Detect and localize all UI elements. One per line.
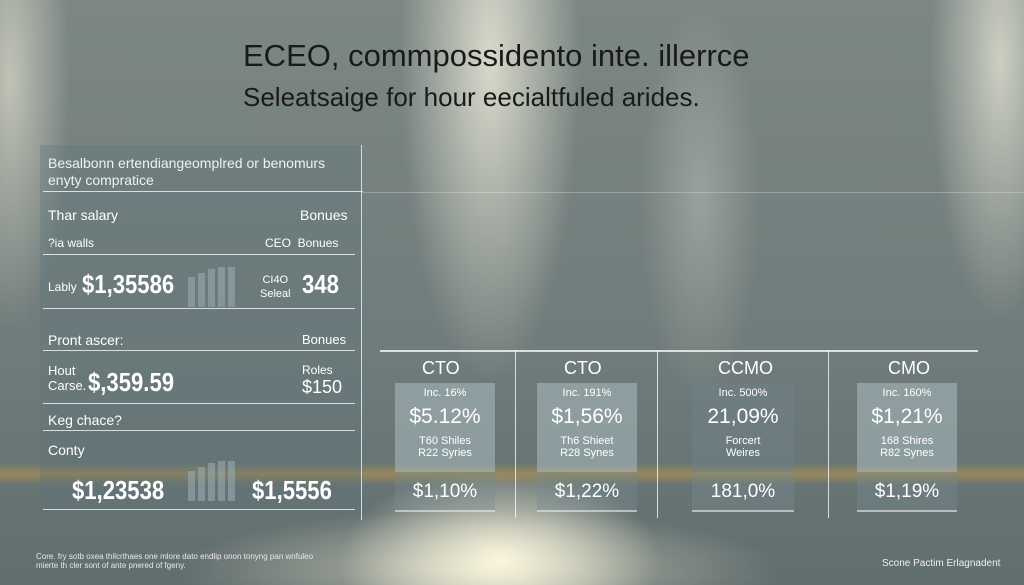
- panel header: [48, 155, 325, 188]
- text: CTO: [564, 358, 602, 378]
- card: CCMO: [692, 387, 794, 512]
- card: CTO 2: Th6 Shieet: [560, 435, 614, 447]
- panel: left comparison table: Roles: [302, 363, 333, 377]
- panel header: enyty compratice: [48, 172, 154, 188]
- card: CMO: [857, 383, 957, 512]
- card: CCMO: Inc. 500%: [719, 387, 767, 399]
- panel: left comparison table: $1,35586: [82, 269, 174, 299]
- card: CMO: $1,21%: [871, 405, 943, 428]
- source credit: Scone Pactim Erlagnadent: [882, 558, 1000, 569]
- row labels: Thar salary: [48, 207, 118, 223]
- card: CCMO: 181,0%: [711, 481, 775, 502]
- card: CTO 2: Inc. 191%: [563, 387, 611, 399]
- card: CTO 1: Inc. 16%: [424, 387, 466, 399]
- panel: left comparison table: CEO Bonues: [265, 236, 338, 250]
- panel: executive cards: [380, 350, 978, 518]
- footnote: Core. fry sotb oxea thilcrthaes one mlore dato endlip onon tonyng pan wnfuleo: [36, 552, 313, 561]
- panel: left comparison table: $150: [302, 377, 342, 397]
- card: CMO: Inc. 160%: [883, 387, 931, 399]
- card: CMO: $1,19%: [875, 481, 939, 502]
- footnote: [36, 552, 313, 570]
- panel: left comparison table: [40, 145, 363, 512]
- card: CMO: R82 Synes: [880, 447, 934, 459]
- bar chart icon: [188, 267, 235, 307]
- panel: left comparison table: Bonues: [300, 207, 347, 223]
- card: CTO 1: R22 Syries: [418, 447, 472, 459]
- panel: left comparison table: Keg chace?: [48, 412, 122, 428]
- card: CTO 2: $1,56%: [551, 405, 623, 428]
- panel: left comparison table: Conty: [48, 442, 85, 458]
- hourly figure: [48, 363, 86, 393]
- title: ECEO, commpossidento inte. illerrce: [243, 38, 750, 73]
- card: CMO: 168 Shires: [881, 435, 933, 447]
- card: CTO 1: T60 Shiles: [419, 435, 471, 447]
- panel: left comparison table: 348: [302, 269, 339, 299]
- card: CCMO: Weires: [726, 447, 760, 459]
- CEO salary figure: Lably: [48, 280, 77, 294]
- panel: left comparison table: ?ia walls: [48, 236, 94, 250]
- card: CCMO: Forcert: [726, 435, 760, 447]
- footnote: mierte th cler sont of ante pnered of fgeny.: [36, 561, 186, 570]
- panel: left comparison table: $1,5556: [252, 475, 332, 505]
- card: CTO 2: R28 Synes: [560, 447, 614, 459]
- panel header: Besalbonn ertendiangeomplred or benomurs: [48, 155, 325, 171]
- panel: left comparison table: Pront ascer:: [48, 332, 123, 348]
- hourly figure: Hout: [48, 363, 75, 378]
- text: CMO: [888, 358, 930, 378]
- panel: left comparison table: CI4O: [262, 274, 288, 286]
- hourly figure: Carse.: [48, 378, 86, 393]
- bottom figures: $1,23538: [72, 475, 164, 505]
- card: CTO 1: $1,10%: [413, 481, 477, 502]
- card: CTO 2: $1,22%: [555, 481, 619, 502]
- card: CCMO: 21,09%: [707, 405, 779, 428]
- card: CTO 2: [537, 383, 637, 512]
- panel: left comparison table: Bonues: [302, 332, 346, 347]
- card titles: CTO: [422, 358, 460, 378]
- card: CTO 1: $5.12%: [409, 405, 481, 428]
- panel: left comparison table: $,359.59: [88, 367, 174, 397]
- card: CTO 1: [395, 383, 495, 512]
- panel: left comparison table: Seleal: [260, 288, 291, 300]
- text: CCMO: [718, 358, 773, 378]
- subtitle: Seleatsaige for hour eecialtfuled arides.: [243, 82, 700, 112]
